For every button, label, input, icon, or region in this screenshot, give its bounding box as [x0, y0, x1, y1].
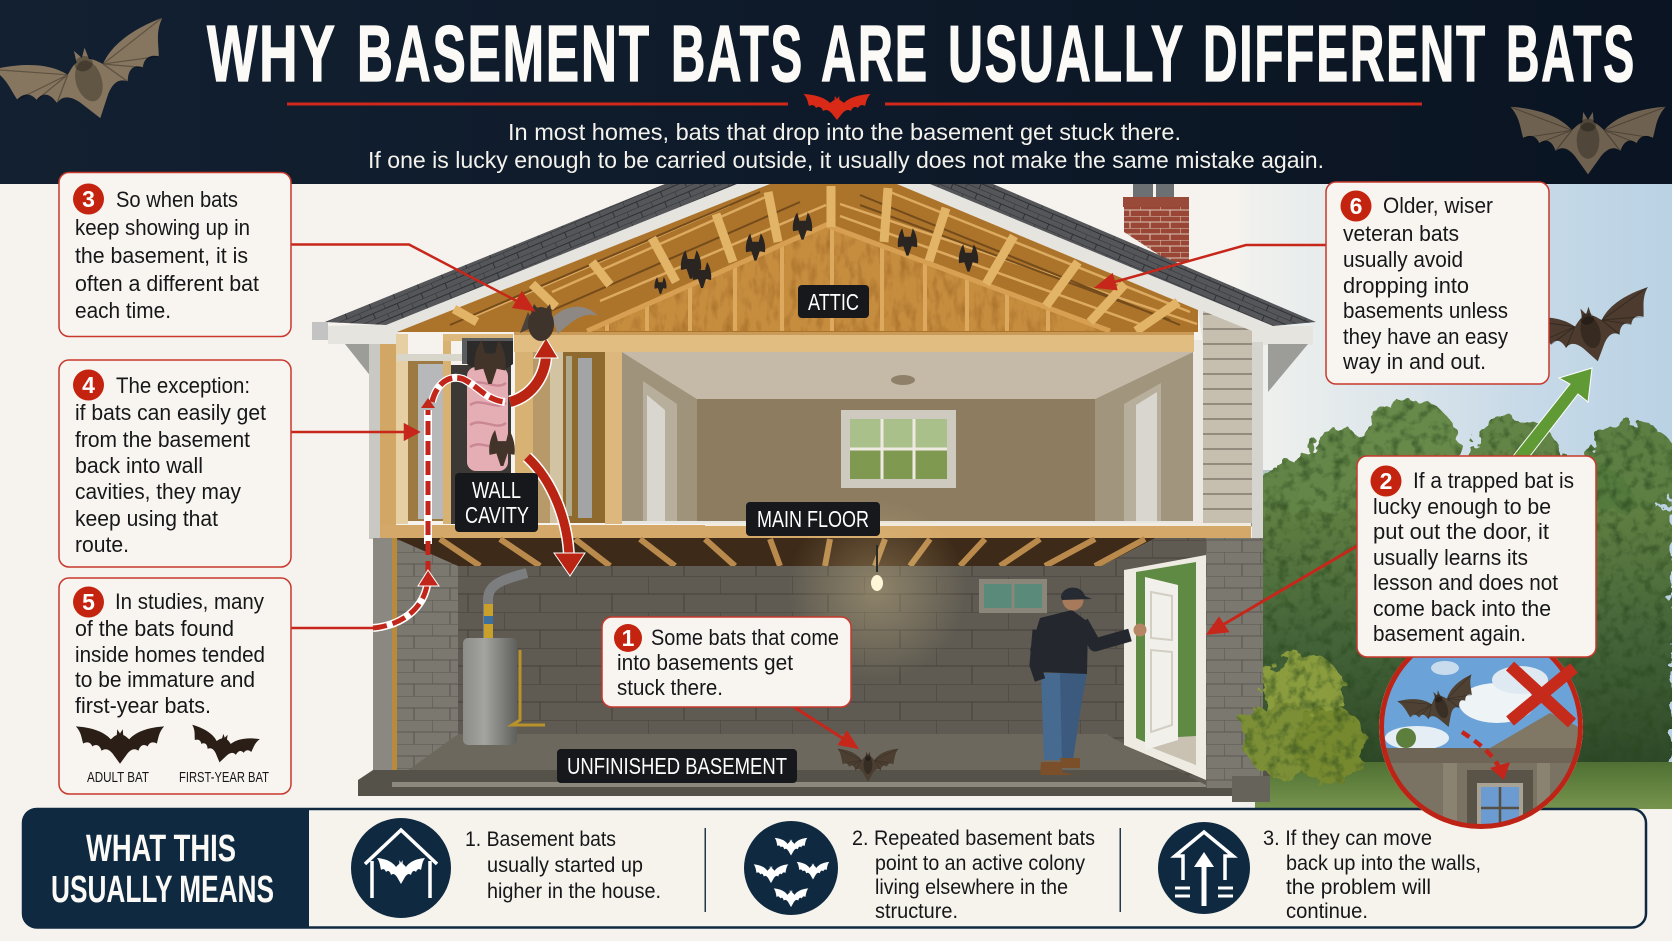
badge 3 — [73, 184, 104, 214]
outdoor scene: sky, trees, grass — [1240, 184, 1672, 809]
location label: attic: ATTIC — [808, 289, 859, 315]
callout 2: If a trapped bat is — [1413, 468, 1574, 493]
ceiling beams and floor joists — [380, 332, 1251, 566]
location label: unfinished basement: UNFINISHED BASEMENT — [567, 753, 787, 779]
callout 1: into basements get — [617, 650, 793, 675]
callout 6: dropping into — [1343, 273, 1469, 298]
solid arc from attic — [510, 338, 558, 402]
first-year bat icon — [186, 725, 260, 770]
item 3 text: continue. — [1286, 900, 1368, 923]
callout 4 — [59, 360, 291, 567]
badge 2: 2 — [1380, 468, 1392, 494]
inset bat — [1397, 674, 1486, 741]
item 1 text: higher in the house. — [487, 880, 661, 903]
decorative bat top left — [0, 18, 185, 144]
location label: wall cavity: WALL — [472, 477, 521, 503]
callout 3: keep showing up in — [75, 215, 250, 240]
callout 5: of the bats found — [75, 616, 234, 641]
badge 6 — [1340, 190, 1372, 222]
person at door — [1030, 588, 1146, 775]
exterior door — [1124, 555, 1206, 780]
navy heading panel: USUALLY MEANS — [51, 869, 274, 911]
title: DIFFERENT — [1203, 9, 1487, 98]
location label: attic — [798, 285, 869, 318]
bush — [1240, 653, 1368, 783]
attic framing — [397, 184, 1198, 332]
floor bat — [838, 749, 898, 782]
callout 3: often a different bat — [75, 271, 259, 296]
callout 3: the basement, it is — [75, 243, 248, 268]
subtitle: If one is lucky enough to be carried outside, it usually does not make the same mistake again. — [368, 147, 1324, 173]
callout 5: ADULT BAT — [87, 770, 149, 786]
callout 6: Older, wiser — [1383, 193, 1493, 218]
callout 4: cavities, they may — [75, 479, 241, 504]
basement walls and floor — [358, 538, 1270, 802]
callout 5: In studies, many — [115, 589, 264, 614]
callout 5: inside homes tended — [75, 642, 265, 667]
item 3 text: 3. If they can move — [1263, 827, 1432, 850]
item 1 icon: bat in house — [351, 818, 451, 918]
item 2 text — [852, 827, 1095, 923]
callout 3 — [59, 172, 291, 336]
callout 2 — [1357, 456, 1596, 657]
callout 1 — [602, 617, 851, 707]
title: WHY — [207, 9, 337, 98]
item 2 text: 2. Repeated basement bats — [852, 827, 1095, 850]
badge 3: 3 — [82, 186, 95, 212]
callout 1: stuck there. — [617, 675, 723, 700]
siding — [1193, 311, 1263, 538]
basement bulb — [871, 545, 883, 591]
leader arrow for step 4 — [291, 425, 418, 439]
item 1 text: usually started up — [487, 854, 643, 877]
inset circle: bat returning — [1379, 658, 1583, 829]
header band — [0, 0, 1672, 184]
title: BASEMENT — [357, 9, 651, 98]
item 3 text: back up into the walls, — [1286, 852, 1481, 875]
callout 6 — [1326, 182, 1549, 384]
callout 4: keep using that — [75, 506, 218, 531]
callout 5: FIRST-YEAR BAT — [179, 770, 269, 786]
item 3 text: the problem will — [1286, 876, 1431, 899]
callout 6: basements unless — [1343, 298, 1508, 323]
badge 2 — [1370, 466, 1402, 496]
location label: unfinished basement — [557, 749, 797, 783]
callout 5 — [59, 578, 291, 794]
main floor room — [622, 352, 1194, 524]
callout 5: first-year bats. — [75, 693, 211, 718]
callout 6: veteran bats — [1343, 221, 1459, 246]
item 2 text: living elsewhere in the — [875, 876, 1068, 899]
bat at attic opening — [520, 304, 598, 341]
dashed route up wall — [373, 378, 505, 628]
red X — [1510, 666, 1574, 723]
room window — [841, 410, 956, 488]
leader arrow for step 3 — [291, 244, 533, 310]
dashed arrow — [1462, 732, 1510, 780]
outside dark bat — [1519, 287, 1662, 377]
callout 4: if bats can easily get — [75, 400, 266, 425]
adult bat icon — [76, 726, 164, 764]
item 3 icon: upward arrows — [1158, 822, 1250, 914]
location label: wall cavity: CAVITY — [465, 502, 529, 528]
item 2 text: structure. — [875, 900, 958, 923]
leader line for step 5 — [291, 627, 375, 629]
location label: wall cavity — [455, 473, 538, 532]
wall cavity framing — [369, 334, 622, 539]
callout 6: usually avoid — [1343, 247, 1463, 272]
leader arrow for step 2 — [1209, 546, 1357, 633]
bottom summary bar — [22, 808, 1646, 928]
callout 3: each time. — [75, 298, 171, 323]
badge 5: 5 — [82, 589, 95, 615]
leader arrow for step 1 — [794, 707, 856, 747]
title — [207, 9, 1636, 98]
item 3 text — [1263, 827, 1481, 923]
callout 2: usually learns its — [1373, 545, 1528, 570]
callout 2: put out the door, it — [1373, 519, 1549, 544]
subtitle: In most homes, bats that drop into the basement get stuck there. — [508, 119, 1181, 145]
solid drop arrow — [527, 457, 585, 576]
attic hanging bats — [654, 212, 978, 294]
callout 2: basement again. — [1373, 621, 1526, 646]
title: USUALLY — [948, 9, 1185, 98]
callout 6: they have an easy — [1343, 324, 1508, 349]
callout 2: lesson and does not — [1373, 570, 1558, 595]
callout 4: The exception: — [116, 373, 250, 398]
item 2 icon: colony of bats — [744, 821, 838, 915]
badge 6: 6 — [1350, 193, 1362, 219]
badge 1: 1 — [622, 625, 635, 651]
callout 2: come back into the — [1373, 596, 1551, 621]
title: BATS — [671, 9, 804, 98]
red divider with bat — [287, 94, 1422, 120]
badge 4 — [73, 370, 104, 400]
item 1 text: 1. Basement bats — [465, 828, 616, 851]
location label: main floor: MAIN FLOOR — [757, 506, 869, 532]
item 2 text: point to an active colony — [875, 852, 1085, 875]
item 1 text — [465, 828, 661, 903]
room doors — [643, 381, 1161, 521]
green arrow to bat — [1513, 368, 1592, 456]
callout 3: So when bats — [116, 187, 238, 212]
chimney — [1123, 180, 1189, 262]
callout 6: way in and out. — [1342, 349, 1486, 374]
badge 1 — [614, 624, 642, 652]
leader arrow for step 6 — [1097, 245, 1326, 289]
red routes in wall — [373, 338, 585, 628]
subtitle — [368, 119, 1324, 173]
basement window — [979, 579, 1047, 613]
callout 4: from the basement — [75, 427, 250, 452]
callout 2: lucky enough to be — [1373, 494, 1551, 519]
callout 1: Some bats that come — [651, 625, 839, 650]
navy heading panel — [22, 808, 309, 928]
house cross-section — [312, 180, 1368, 802]
badge 4: 4 — [82, 372, 95, 398]
roof shingles and fascia — [312, 184, 1316, 392]
title: ARE — [821, 9, 929, 98]
navy heading panel: WHAT THIS — [86, 828, 236, 870]
badge 5 — [73, 586, 104, 618]
callout 5: to be immature and — [75, 667, 255, 692]
water heater — [463, 573, 545, 745]
callout 4: back into wall — [75, 453, 203, 478]
ceiling light — [891, 375, 915, 385]
location label: main floor — [746, 502, 880, 536]
decorative bat top right — [1510, 107, 1666, 174]
callout 4: route. — [75, 532, 129, 557]
